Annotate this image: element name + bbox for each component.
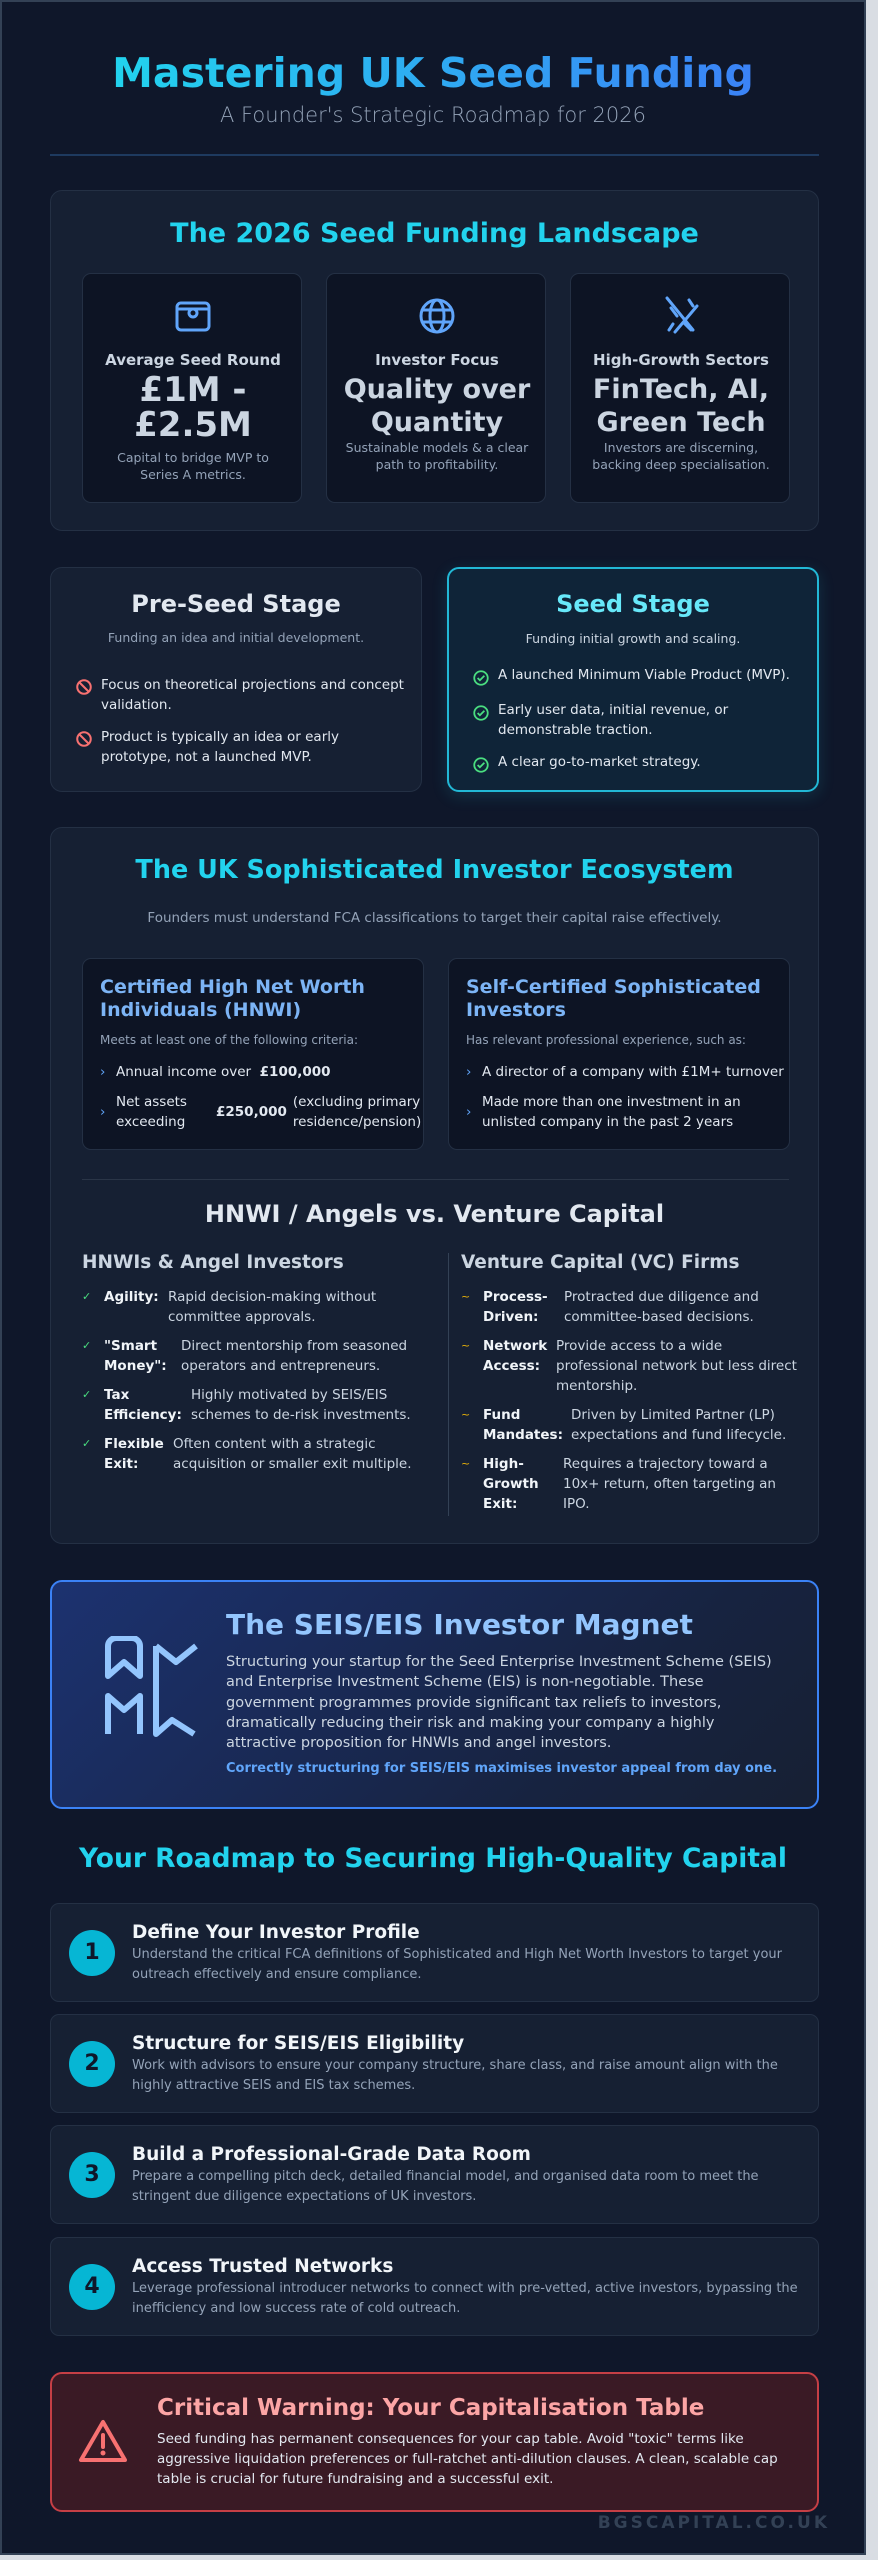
value: Quality over [344, 374, 530, 405]
heading: roadmap: Your Roadmap to Securing High-Quality Capital [79, 1843, 787, 1874]
step 2 [50, 2014, 819, 2113]
column: angels: ✓ [82, 1290, 91, 1303]
criteria list: Annual income over [116, 1064, 251, 1080]
step text: Access Trusted Networks [132, 2256, 393, 2277]
criteria list: Made more than one investment in an unlisted company in the past 2 years [482, 1094, 741, 1130]
value [593, 374, 769, 438]
label: Investor Focus [375, 351, 499, 369]
column: angels: Highly motivated by SEIS/EIS schemes to de-risk investments. [191, 1387, 411, 1423]
step 4 [50, 2237, 819, 2336]
criteria list: (excluding primary residence/pension) [293, 1094, 421, 1130]
card title: Investors [466, 999, 566, 1021]
card title [100, 976, 365, 1021]
step text: Structure for SEIS/EIS Eligibility [132, 2033, 464, 2054]
column: angels: ✓ [82, 1437, 91, 1450]
criteria label: Has relevant professional experience, such as: [466, 1033, 746, 1047]
criteria list: › [466, 1104, 471, 1120]
warning text: Seed funding has permanent consequences for your cap table. Avoid "toxic" terms like aggressive liquidation preferences or full-ratchet anti-dilution clauses. A clean, scalable cap table is crucial for future fundraising and a successful exit. [157, 2431, 778, 2487]
label: Average Seed Round [105, 351, 281, 369]
list: seed traits: Early user data, initial revenue, or demonstrable traction. [498, 702, 728, 738]
criteria list: › [100, 1104, 105, 1120]
heading: ecosystem: The UK Sophisticated Investor Ecosystem [135, 855, 734, 885]
column: venture capital: Process-Driven: [483, 1289, 548, 1325]
step text: Build a Professional-Grade Data Room [132, 2144, 531, 2165]
column: venture capital: Network Access: [483, 1338, 547, 1374]
title: Mastering UK Seed Funding [112, 49, 754, 97]
list: pre-seed traits: Focus on theoretical projections and concept validation. [101, 677, 404, 713]
column: angels: Rapid decision-making without committee approvals. [168, 1289, 376, 1325]
card: average seed round [82, 273, 302, 503]
step text [132, 1922, 782, 1982]
step text [132, 2033, 778, 2093]
list: pre-seed traits: Product is typically an idea or early prototype, not a launched MVP. [101, 729, 339, 765]
column: angels: ✓ [82, 1339, 91, 1352]
criteria list: Net assets exceeding [116, 1094, 187, 1130]
icon: globe [420, 298, 454, 334]
step text: Prepare a compelling pitch deck, detailed financial model, and organised data room to meet the stringent due diligence expectations of UK investors. [132, 2169, 759, 2204]
column: venture capital: ~ [461, 1290, 470, 1303]
number badge: 2 [84, 2051, 100, 2076]
step text [132, 2256, 798, 2316]
column: angels: ✓ [82, 1388, 91, 1401]
card title: Individuals (HNWI) [100, 999, 301, 1021]
criteria list: £250,000 [216, 1104, 287, 1120]
description: Investors are discerning, backing deep specialisation. [592, 440, 770, 472]
column: angels: "Smart Money": [104, 1338, 167, 1374]
step text: Define Your Investor Profile [132, 1922, 420, 1943]
number badge [69, 2264, 115, 2310]
column: angels: Flexible Exit: [104, 1436, 164, 1472]
panel: critical warning [50, 2372, 819, 2512]
value [134, 370, 252, 445]
column: angels: Direct mentorship from seasoned operators and entrepreneurs. [181, 1338, 407, 1374]
subtitle: Funding initial growth and scaling. [526, 631, 740, 646]
subtitle: A Founder's Strategic Roadmap for 2026 [220, 103, 646, 127]
footer brand: BGSCAPITAL.CO.UK [598, 2513, 830, 2533]
number badge [69, 1930, 115, 1976]
heading: SEIS: The SEIS/EIS Investor Magnet [226, 1608, 693, 1641]
step 3 [50, 2125, 819, 2224]
column: venture capital: ~ [461, 1457, 470, 1470]
intro text: Founders must understand FCA classifications to target their capital raise effectively. [147, 910, 722, 926]
label: High-Growth Sectors [593, 351, 769, 369]
body text: Structuring your startup for the Seed Enterprise Investment Scheme (SEIS) and Enterprise Investment Scheme (EIS) is non-negotiable. These government programmes provide significant tax reliefs to investors, dramatically reducing their risk and making your company a highly attractive proposition for HNWIs and angel investors. [226, 1654, 772, 1751]
icon: warning [78, 2420, 127, 2462]
heading: seed: Seed Stage [556, 590, 710, 618]
column: venture capital: Protracted due diligence and committee-based decisions. [564, 1289, 759, 1325]
column heading: Venture Capital (VC) Firms [461, 1252, 740, 1273]
column: venture capital: Fund Mandates: [483, 1407, 563, 1443]
value: £1M - [139, 370, 247, 410]
criteria list: A director of a company with £1M+ turnover [482, 1064, 784, 1080]
column: angels: Often content with a strategic acquisition or smaller exit multiple. [173, 1436, 412, 1472]
icon: wallet [176, 302, 210, 332]
column: venture capital: High-Growth Exit: [483, 1456, 539, 1512]
number badge: 3 [84, 2162, 100, 2187]
heading: landscape: The 2026 Seed Funding Landscape [170, 218, 699, 249]
description: Capital to bridge MVP to Series A metrics. [117, 450, 269, 482]
list: seed traits [473, 667, 790, 773]
list: seed traits: A clear go-to-market strategy. [498, 754, 701, 770]
step text: Leverage professional introducer networks to connect with pre-vetted, active investors, bypassing the inefficiency and low success rate of cold outreach. [132, 2281, 798, 2316]
heading: warning: Critical Warning: Your Capitalisation Table [157, 2395, 704, 2421]
callout: Correctly structuring for SEIS/EIS maximises investor appeal from day one. [226, 1761, 777, 1776]
criteria list [466, 1064, 784, 1130]
panel: SEIS/EIS magnet [50, 1580, 819, 1809]
criteria list: › [100, 1064, 105, 1080]
icon: bookmarks [105, 1636, 198, 1737]
number badge [69, 2041, 115, 2087]
list: pre-seed traits [76, 677, 404, 765]
value: Quantity [371, 407, 503, 438]
column: venture capital: Provide access to a wide professional network but less direct mentorship. [556, 1338, 797, 1394]
column: angels: Tax Efficiency: [104, 1387, 182, 1423]
number badge: 1 [84, 1940, 100, 1965]
step text: Understand the critical FCA definitions of Sophisticated and High Net Worth Investors to target your outreach effectively and ensure compliance. [132, 1947, 782, 1982]
column: venture capital: Requires a trajectory toward a 10x+ return, often targeting an IPO. [563, 1456, 776, 1512]
value: £2.5M [134, 405, 252, 445]
value: FinTech, AI, [593, 374, 769, 405]
criteria label: Meets at least one of the following criteria: [100, 1033, 358, 1047]
heading: pre-seed: Pre-Seed Stage [131, 590, 341, 618]
column: venture capital [461, 1252, 797, 1512]
step 1 [50, 1903, 819, 2002]
criteria list [100, 1064, 421, 1130]
card: investor focus [326, 273, 546, 503]
icon: sectors [665, 296, 699, 334]
card: high-growth sectors [570, 273, 790, 503]
step text [132, 2144, 759, 2204]
value [344, 374, 530, 438]
panel: pre-seed stage [50, 567, 422, 792]
criteria list: › [466, 1064, 471, 1080]
panel: seed stage [447, 567, 819, 792]
column: venture capital: ~ [461, 1408, 470, 1421]
card title: Self-Certified Sophisticated [466, 976, 761, 998]
criteria list: £100,000 [260, 1064, 331, 1080]
card: HNWI [82, 958, 424, 1150]
subtitle: Funding an idea and initial development. [108, 630, 364, 645]
column: venture capital: ~ [461, 1339, 470, 1352]
card: self-certified [448, 958, 790, 1150]
card title [466, 976, 761, 1021]
column heading: HNWIs & Angel Investors [82, 1252, 344, 1273]
description: Sustainable models & a clear path to profitability. [346, 440, 528, 472]
number badge: 4 [84, 2274, 100, 2299]
column: angels: Agility: [104, 1289, 159, 1305]
panel: investor ecosystem [50, 827, 819, 1544]
step text: Work with advisors to ensure your company structure, share class, and raise amount align with the highly attractive SEIS and EIS tax schemes. [132, 2058, 778, 2093]
panel: seed funding landscape [50, 190, 819, 531]
value: Green Tech [596, 407, 766, 438]
column: angels [82, 1252, 412, 1472]
column: venture capital: Driven by Limited Partner (LP) expectations and fund lifecycle. [571, 1407, 786, 1443]
list: seed traits: A launched Minimum Viable Product (MVP). [498, 667, 790, 683]
number badge [69, 2152, 115, 2198]
card title: Certified High Net Worth [100, 976, 365, 998]
heading: comparison: HNWI / Angels vs. Venture Capital [205, 1200, 664, 1228]
